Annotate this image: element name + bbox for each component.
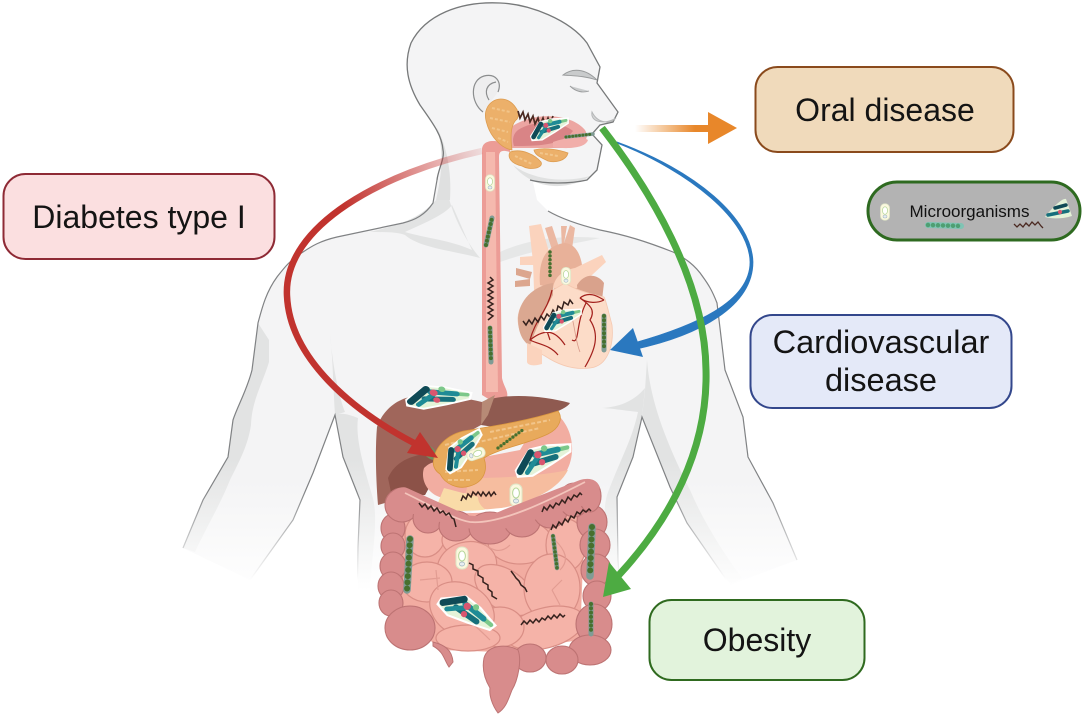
box: oral disease: Oral disease [795, 92, 975, 128]
arrow: diabetes type I [287, 151, 482, 458]
legend: microorganisms: Microorganisms [910, 202, 1029, 221]
box: oral disease [756, 67, 1014, 152]
legend icon: chain [928, 225, 961, 226]
abdominal microorganisms [405, 378, 570, 506]
appendix [433, 642, 453, 667]
ascending colon [378, 514, 435, 650]
ear [473, 75, 499, 112]
box: cardiovascular disease: Cardiovascular [773, 324, 990, 360]
oral microorganisms [518, 111, 593, 141]
human body silhouette [183, 3, 797, 620]
intestine folds [420, 540, 565, 640]
left shoulder and arm outline [183, 180, 437, 548]
rectum [483, 646, 520, 713]
salivary glands [486, 99, 568, 169]
legend icon: rods [1048, 205, 1068, 215]
box: diabetes type I [4, 174, 274, 259]
collarbone shading [370, 190, 480, 258]
heart [515, 224, 612, 368]
transverse colon top strip [390, 479, 600, 530]
legend icon: cluster [1045, 199, 1072, 218]
large intestine [378, 479, 612, 713]
box: diabetes type I: Diabetes type I [32, 199, 246, 235]
gallbladder [420, 445, 440, 460]
heart microorganisms [523, 300, 573, 325]
transverse colon lobes [385, 480, 601, 544]
arrow: cardiovascular disease [610, 142, 753, 357]
arrow: obesity [602, 128, 706, 597]
jaw shadow [513, 165, 590, 186]
nose shadow [592, 112, 616, 122]
legend icon: capsule [880, 204, 890, 220]
box: obesity [650, 600, 864, 680]
colon inner band [405, 482, 585, 522]
box: obesity: Obesity [703, 622, 811, 658]
small intestine [400, 510, 589, 658]
intestinal microorganisms [407, 493, 592, 646]
eye and brow [563, 70, 597, 92]
esophagus [482, 141, 510, 400]
legend: microorganisms [868, 182, 1080, 240]
pancreas [433, 411, 560, 487]
pancreas texture [445, 420, 550, 480]
neck shading [436, 128, 450, 200]
right shoulder and arm outline [548, 211, 797, 560]
liver [376, 395, 570, 505]
gland texture [490, 108, 558, 164]
mouth cavity [506, 116, 588, 148]
stomach and duodenum [423, 415, 572, 516]
head outline [407, 3, 618, 183]
box: cardiovascular disease: disease [825, 362, 937, 398]
body shading [183, 323, 742, 600]
box: cardiovascular disease [750, 315, 1012, 408]
arrow: oral disease [635, 112, 737, 144]
right inner arm and torso outline [617, 417, 730, 620]
coronary arteries [530, 290, 604, 367]
legend icon: spiral [1014, 222, 1043, 228]
descending colon [514, 505, 612, 674]
esophagus microorganisms [486, 175, 494, 362]
left inner arm and torso outline [250, 415, 360, 620]
